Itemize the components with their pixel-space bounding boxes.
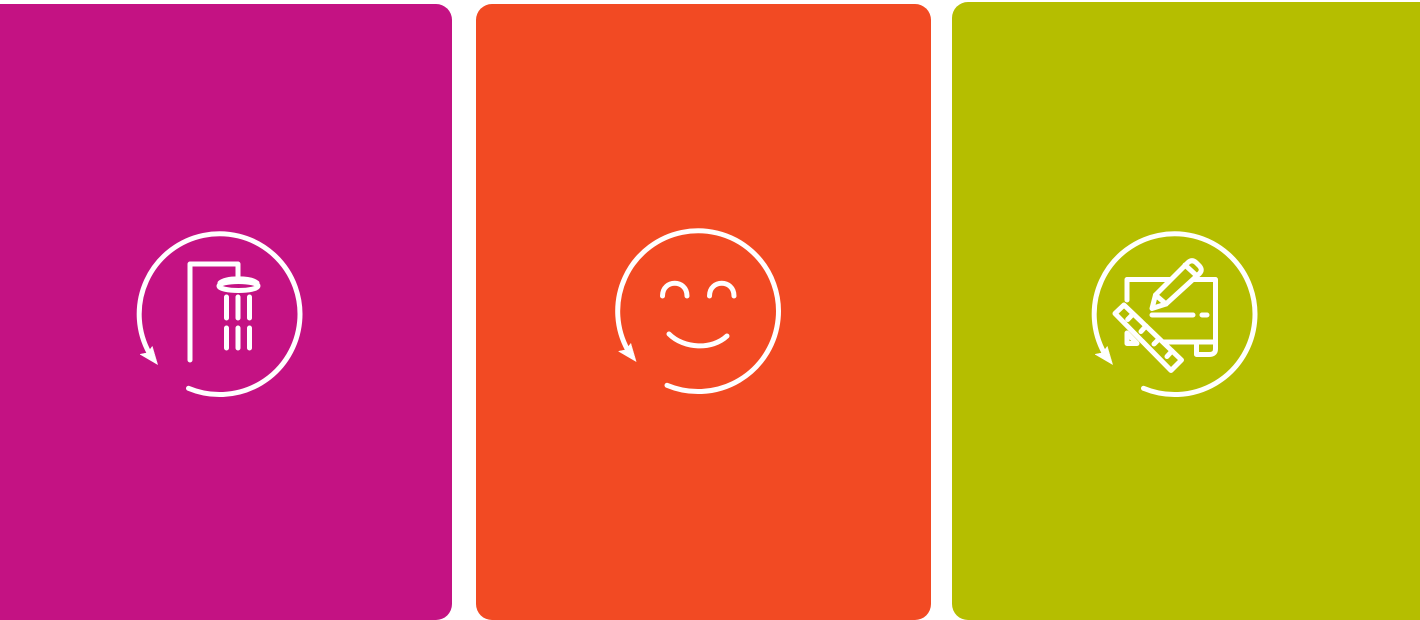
panel: magenta shower [0,4,452,620]
icon: circular arrow (smile) [618,231,778,392]
icon: circular arrow (drawing tools) [1094,234,1255,395]
icon: shower [190,264,258,360]
icon: paper with pencil and ruler [1115,261,1216,370]
panel: olive drawing tools [952,2,1420,620]
icon: circular arrow (shower) [139,234,300,395]
panel: orange smile [476,4,931,620]
icon: smiling face [662,283,734,346]
